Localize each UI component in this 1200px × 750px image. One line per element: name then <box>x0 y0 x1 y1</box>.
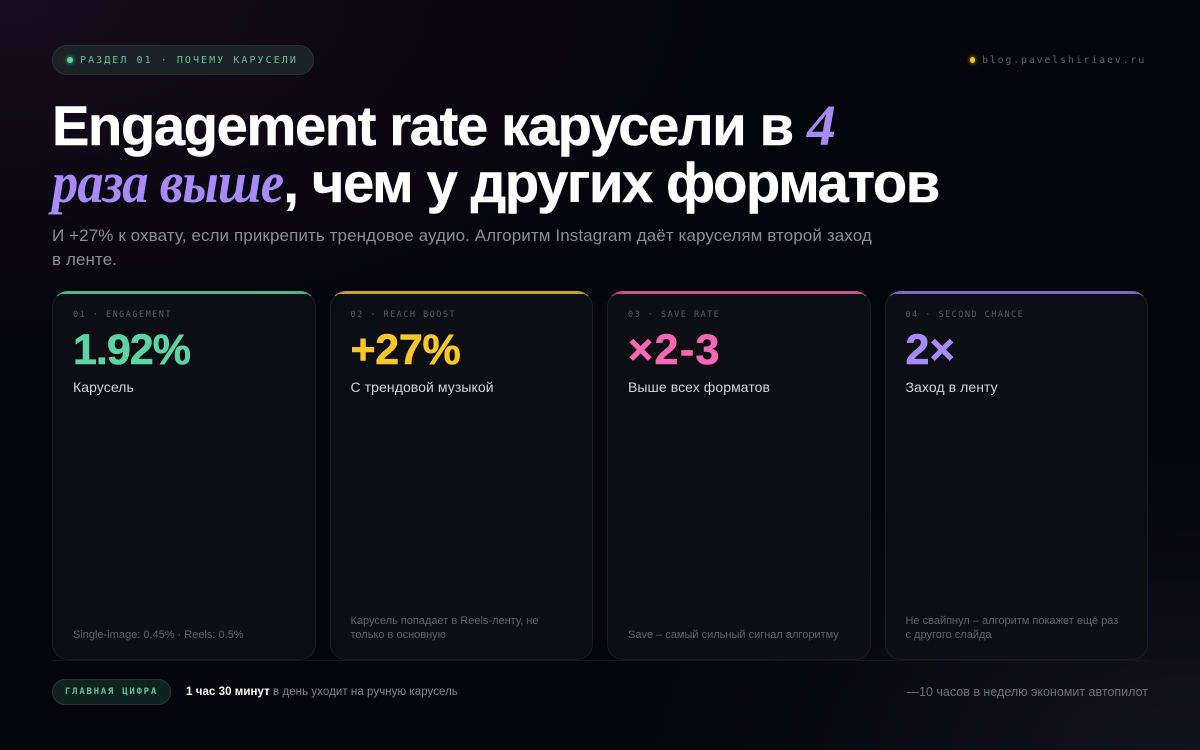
card 4 note: Не свайпнул – алгоритм покажет ещё раз <box>906 615 1118 627</box>
card 3 caption: Выше всех форматов <box>628 379 770 395</box>
card 2 label: 02 · REACH BOOST <box>350 310 456 320</box>
card 1 number: 1.92% <box>73 326 190 374</box>
badge dot <box>67 57 73 63</box>
card 4 number: 2× <box>906 326 955 374</box>
card 4 label: 04 · SECOND CHANCE <box>906 310 1024 320</box>
card 1 note: Single-image: 0.45% · Reels: 0.5% <box>73 629 244 641</box>
subtitle <box>52 226 872 268</box>
subtitle: И +27% к охвату, если прикрепить трендовое аудио. Алгоритм Instagram даёт каруселям второй заход <box>52 226 872 245</box>
key figure badge <box>52 679 171 705</box>
title <box>48 93 939 215</box>
card 3 label: 03 · SAVE RATE <box>628 310 720 320</box>
card 4 note <box>906 615 1118 641</box>
title: , чем у других форматов <box>283 151 939 214</box>
panel: save rate card <box>607 291 870 660</box>
title: раза выше <box>52 150 283 215</box>
site text: blog.pavelshiriaev.ru <box>982 55 1146 66</box>
card 2 caption: С трендовой музыкой <box>350 379 494 395</box>
card 2 note <box>350 615 539 641</box>
section badge <box>52 45 314 75</box>
card 2 number: +27% <box>350 326 460 374</box>
key figure text: 1 час 30 минут в день уходит на ручную карусель <box>186 686 458 698</box>
card 2 note: Карусель попадает в Reels-ленту, не <box>350 615 539 627</box>
card 2 note: только в основную <box>350 629 446 641</box>
subtitle: в ленте. <box>52 250 117 268</box>
card 4 caption: Заход в ленту <box>906 379 998 395</box>
badge text: РАЗДЕЛ 01 · ПОЧЕМУ КАРУСЕЛИ <box>80 55 298 66</box>
site dot <box>970 57 975 63</box>
card 3 note: Save – самый сильный сигнал алгоритму <box>628 629 839 641</box>
panel: reach boost card <box>330 291 593 660</box>
key figure badge: ГЛАВНАЯ ЦИФРА <box>65 687 158 697</box>
panel: second chance card <box>884 291 1148 660</box>
site link <box>966 54 1146 66</box>
panel: engagement card <box>52 291 316 660</box>
card 3 number: ×2-3 <box>628 326 721 374</box>
title: Engagement rate карусели в 4 <box>52 93 835 158</box>
savings note: —10 часов в неделю экономит автопилот <box>907 685 1148 699</box>
card 4 note: с другого слайда <box>906 629 992 641</box>
card 1 caption: Карусель <box>73 379 134 395</box>
card 1 label: 01 · ENGAGEMENT <box>73 310 172 320</box>
